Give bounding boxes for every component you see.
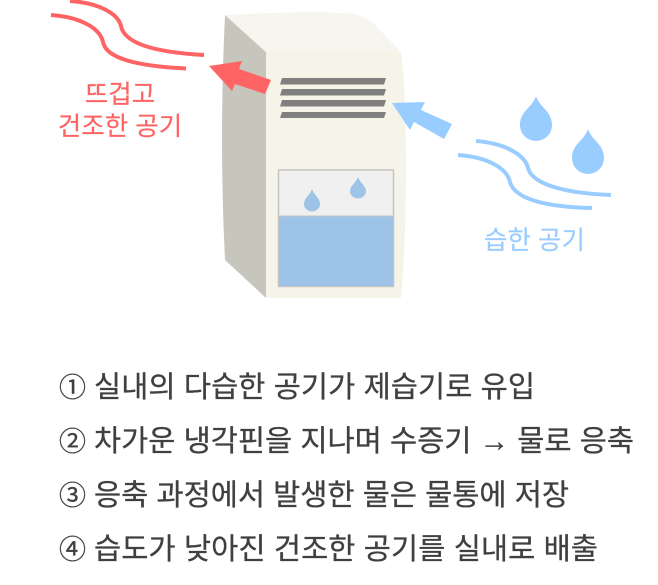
label: hot dry air: 건조한 공기 [58, 113, 182, 141]
step 4: ④ [59, 535, 86, 565]
step 3: 응축 과정에서 발생한 물은 물통에 저장 [94, 479, 569, 512]
label: hot dry air [58, 81, 182, 141]
step 2: 차가운 냉각핀을 지나며 수증기 → 물로 응축 [94, 425, 634, 458]
label: hot dry air: 뜨겁고 [85, 81, 155, 109]
step 3: ③ [59, 481, 86, 511]
step 1: ① [59, 373, 86, 403]
step 1: 실내의 다습한 공기가 제습기로 유입 [94, 371, 535, 404]
air vents [280, 78, 386, 118]
step 4: 습도가 낮아진 건조한 공기를 실내로 배출 [94, 533, 598, 566]
steps list [59, 371, 634, 566]
water drop: large left [520, 96, 552, 141]
water droplet [350, 177, 366, 198]
unit top panel [225, 12, 401, 52]
arrow: humid air in [392, 102, 452, 139]
arrow: hot air out [209, 61, 271, 94]
dehumidifier unit [222, 12, 406, 298]
water droplet [304, 189, 320, 212]
label: humid air: 습한 공기 [484, 227, 585, 255]
unit side panel [222, 15, 266, 298]
humid air wavy lines [458, 141, 611, 208]
hot air wavy lines [51, 1, 204, 68]
step 2: ② [59, 427, 86, 457]
unit front panel [266, 52, 406, 298]
water drop: large right [572, 129, 604, 174]
water tank [278, 170, 394, 286]
